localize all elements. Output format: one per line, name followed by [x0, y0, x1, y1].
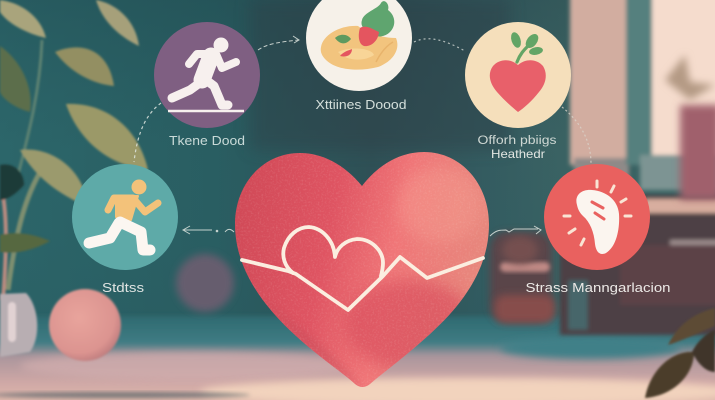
- connector arrow: exercise to food: [258, 36, 299, 50]
- label: stress: Stdtss: [102, 280, 145, 295]
- icon: white bulb shape with rays: [564, 181, 631, 254]
- heart shading and highlight: [230, 150, 492, 390]
- background: window and right-side furniture: [490, 0, 715, 335]
- connector: nutrition to stress management: [562, 107, 591, 164]
- icon: food plate: [321, 1, 397, 70]
- icon: heart with leaves: [490, 31, 546, 112]
- step: exercise (purple circle): [154, 22, 260, 128]
- step: nutrition (cream circle): [465, 22, 571, 128]
- step: diet (food circle): [306, 0, 412, 91]
- label: nutrition: Offorh pbiigs: [478, 135, 557, 147]
- central heart with heartbeat line: [230, 150, 492, 390]
- label: nutrition: [478, 135, 557, 161]
- connector: food to nutrition: [414, 39, 465, 51]
- connector arrow: heart to teal circle: [183, 226, 234, 234]
- heartbeat line forming a small heart: [242, 227, 483, 310]
- step: stress (teal circle): [72, 164, 178, 270]
- label: diet: Xttiines Doood: [316, 98, 407, 112]
- foreground dark plant at right: [645, 308, 715, 398]
- icon: running figure in orange and white: [89, 180, 158, 250]
- plant and vase at left: [0, 0, 148, 357]
- step: stress management (red circle): [544, 164, 650, 270]
- label: nutrition: Heathedr: [491, 147, 545, 161]
- icon: white running figure: [168, 38, 244, 111]
- connector: teal circle up to purple circle: [134, 103, 161, 162]
- label: stress management: Strass Manngarlacion: [526, 280, 670, 295]
- label: exercise: Tkene Dood: [169, 134, 245, 148]
- decorative balls: [49, 254, 234, 361]
- connector arrow: heart to stress management circle: [490, 226, 541, 236]
- large textured heart: [235, 152, 489, 387]
